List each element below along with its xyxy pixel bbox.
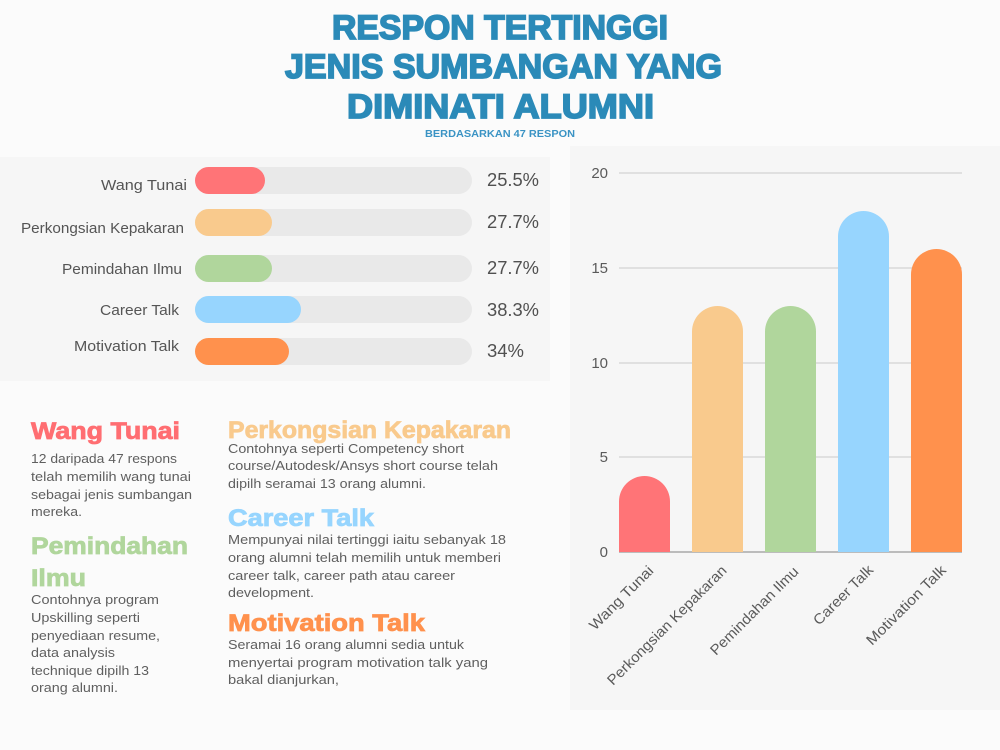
- x axis labels: Perkongsian Kepakaran: [605, 563, 730, 689]
- text block: Motivation Talk: [228, 610, 488, 687]
- text block: Wang Tunai: telah memilih wang tunai: [31, 469, 191, 484]
- x axis labels: Wang Tunai: [587, 563, 657, 634]
- text block: Career Talk: career talk, career path atau career: [228, 568, 456, 583]
- title: RESPON TERTINGGI: [332, 9, 668, 47]
- text block: Perkongsian Kepakaran: [228, 417, 511, 491]
- x axis labels: Motivation Talk: [864, 562, 950, 649]
- text block: Perkongsian Kepakaran: course/Autodesk/Ansys short course telah: [228, 458, 498, 473]
- bar: Career Talk: [838, 211, 889, 552]
- text block: Career Talk: orang alumni telah memilih untuk memberi: [228, 550, 501, 565]
- bar: Motivation Talk: [911, 249, 962, 552]
- x axis labels: Career Talk: [811, 562, 878, 629]
- text block: Wang Tunai: Wang Tunai: [31, 418, 180, 445]
- text block: Wang Tunai: sebagai jenis sumbangan: [31, 487, 192, 502]
- text block: Pemindahan Ilmu: orang alumni.: [31, 680, 118, 695]
- text block: Perkongsian Kepakaran: Perkongsian Kepakaran: [228, 417, 511, 444]
- text block: Motivation Talk: Motivation Talk: [228, 610, 426, 637]
- title: DIMINATI ALUMNI: [347, 88, 654, 126]
- text block: Career Talk: Career Talk: [228, 505, 375, 532]
- y axis labels: 15: [591, 260, 608, 277]
- text block: Pemindahan Ilmu: penyediaan resume,: [31, 628, 160, 643]
- x axis labels: [587, 562, 950, 689]
- row: Motivation Talk: Motivation Talk: [74, 338, 180, 355]
- title: [285, 9, 722, 126]
- bar: Pemindahan Ilmu: [765, 306, 816, 552]
- subtitle: BERDASARKAN 47 RESPON: [425, 128, 575, 140]
- text block: Pemindahan Ilmu: Contohnya program: [31, 592, 159, 607]
- text block: Motivation Talk: bakal dianjurkan,: [228, 672, 339, 687]
- row: Perkongsian Kepakaran: Perkongsian Kepakaran: [21, 220, 184, 237]
- bar: Perkongsian Kepakaran: [692, 306, 743, 552]
- row: Pemindahan Ilmu: Pemindahan Ilmu: [62, 261, 182, 278]
- row: Wang Tunai: Wang Tunai: [101, 177, 187, 194]
- row: Career Talk: [100, 296, 539, 323]
- row: Career Talk: 38.3%: [487, 300, 539, 320]
- text block: Wang Tunai: 12 daripada 47 respons: [31, 451, 178, 466]
- y axis labels: 20: [591, 165, 608, 182]
- y axis labels: 0: [600, 544, 608, 561]
- text block: Wang Tunai: mereka.: [31, 504, 82, 519]
- text block: Pemindahan Ilmu: [31, 533, 188, 695]
- text block: Wang Tunai: [31, 418, 192, 519]
- x axis labels: Pemindahan Ilmu: [708, 564, 802, 659]
- row: Perkongsian Kepakaran: [21, 209, 539, 237]
- row: Pemindahan Ilmu: 27.7%: [487, 258, 539, 278]
- row: Motivation Talk: 34%: [487, 341, 524, 361]
- text block: Perkongsian Kepakaran: Contohnya seperti Competency short: [228, 441, 464, 456]
- text block: Career Talk: Mempunyai nilai tertinggi iaitu sebanyak 18: [228, 532, 506, 547]
- text block: Pemindahan Ilmu: Upskilling seperti: [31, 610, 140, 625]
- row: Perkongsian Kepakaran: 27.7%: [487, 212, 539, 232]
- y axis labels: 5: [600, 449, 608, 466]
- text block: Pemindahan Ilmu: data analysis: [31, 645, 116, 660]
- title: JENIS SUMBANGAN YANG: [285, 48, 722, 86]
- text block: Pemindahan Ilmu: Ilmu: [31, 565, 86, 592]
- row: Wang Tunai: 25.5%: [487, 170, 539, 190]
- row: Wang Tunai: [101, 167, 539, 194]
- text block: Career Talk: development.: [228, 585, 314, 600]
- text block: Motivation Talk: Seramai 16 orang alumni sedia untuk: [228, 637, 465, 652]
- y axis labels: [591, 165, 608, 561]
- row: Motivation Talk: [74, 338, 524, 365]
- panel: column chart: [570, 146, 1000, 710]
- panel: horizontal progress bars: [0, 157, 550, 381]
- row: Career Talk: Career Talk: [100, 302, 180, 319]
- text block: Pemindahan Ilmu: Pemindahan: [31, 533, 188, 560]
- y axis labels: 10: [591, 355, 608, 372]
- bar: Wang Tunai: [619, 476, 670, 552]
- text block: Pemindahan Ilmu: technique dipilh 13: [31, 663, 149, 678]
- text block: Motivation Talk: menyertai program motivation talk yang: [228, 655, 488, 670]
- text block: Career Talk: [228, 505, 506, 600]
- text block: Perkongsian Kepakaran: dipilh seramai 13 orang alumni.: [228, 476, 426, 491]
- row: Pemindahan Ilmu: [62, 255, 539, 282]
